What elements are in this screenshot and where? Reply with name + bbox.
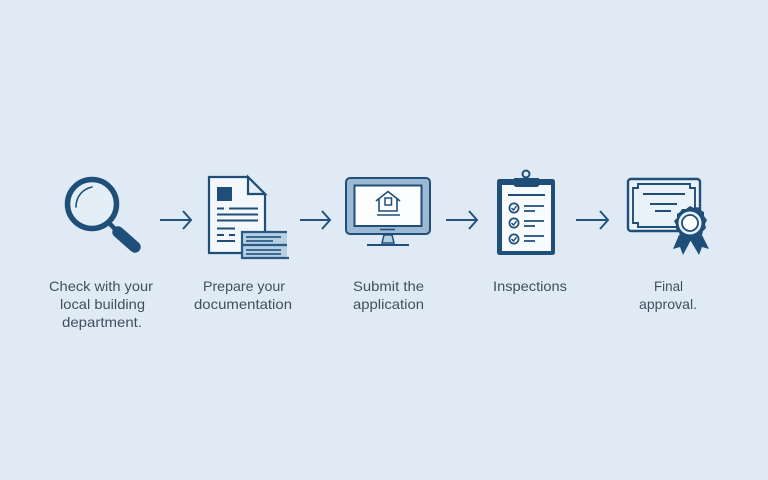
text: step 2 label: Prepare your (203, 278, 285, 294)
arrow: step 4 to 5 (576, 211, 608, 229)
arrow: step 2 to 3 (300, 211, 330, 229)
text: step 3 label: application (353, 296, 424, 312)
text: step 4 label: Inspections (493, 278, 567, 294)
text: step 1 label: Check with your (49, 278, 153, 294)
icon: magnifying glass (68, 180, 135, 247)
icon: clipboard checklist (497, 170, 555, 255)
icon: computer monitor with house (346, 178, 430, 245)
icon: document with stacked papers (209, 177, 289, 258)
text: step 1 label: local building (60, 296, 145, 312)
text: step 3 label: Submit the (353, 278, 424, 294)
text: step 5 label: approval. (639, 296, 697, 312)
arrow: step 3 to 4 (446, 211, 477, 229)
text: step 5 label (639, 278, 697, 312)
arrow: step 1 to 2 (160, 211, 191, 229)
text: step 2 label (194, 278, 292, 312)
icon: certificate with seal (628, 179, 709, 255)
text: step 1 label: department. (62, 314, 142, 330)
text: step 5 label: Final (654, 278, 683, 294)
text: step 3 label (353, 278, 424, 312)
text: step 2 label: documentation (194, 296, 292, 312)
text: step 1 label (49, 278, 153, 330)
